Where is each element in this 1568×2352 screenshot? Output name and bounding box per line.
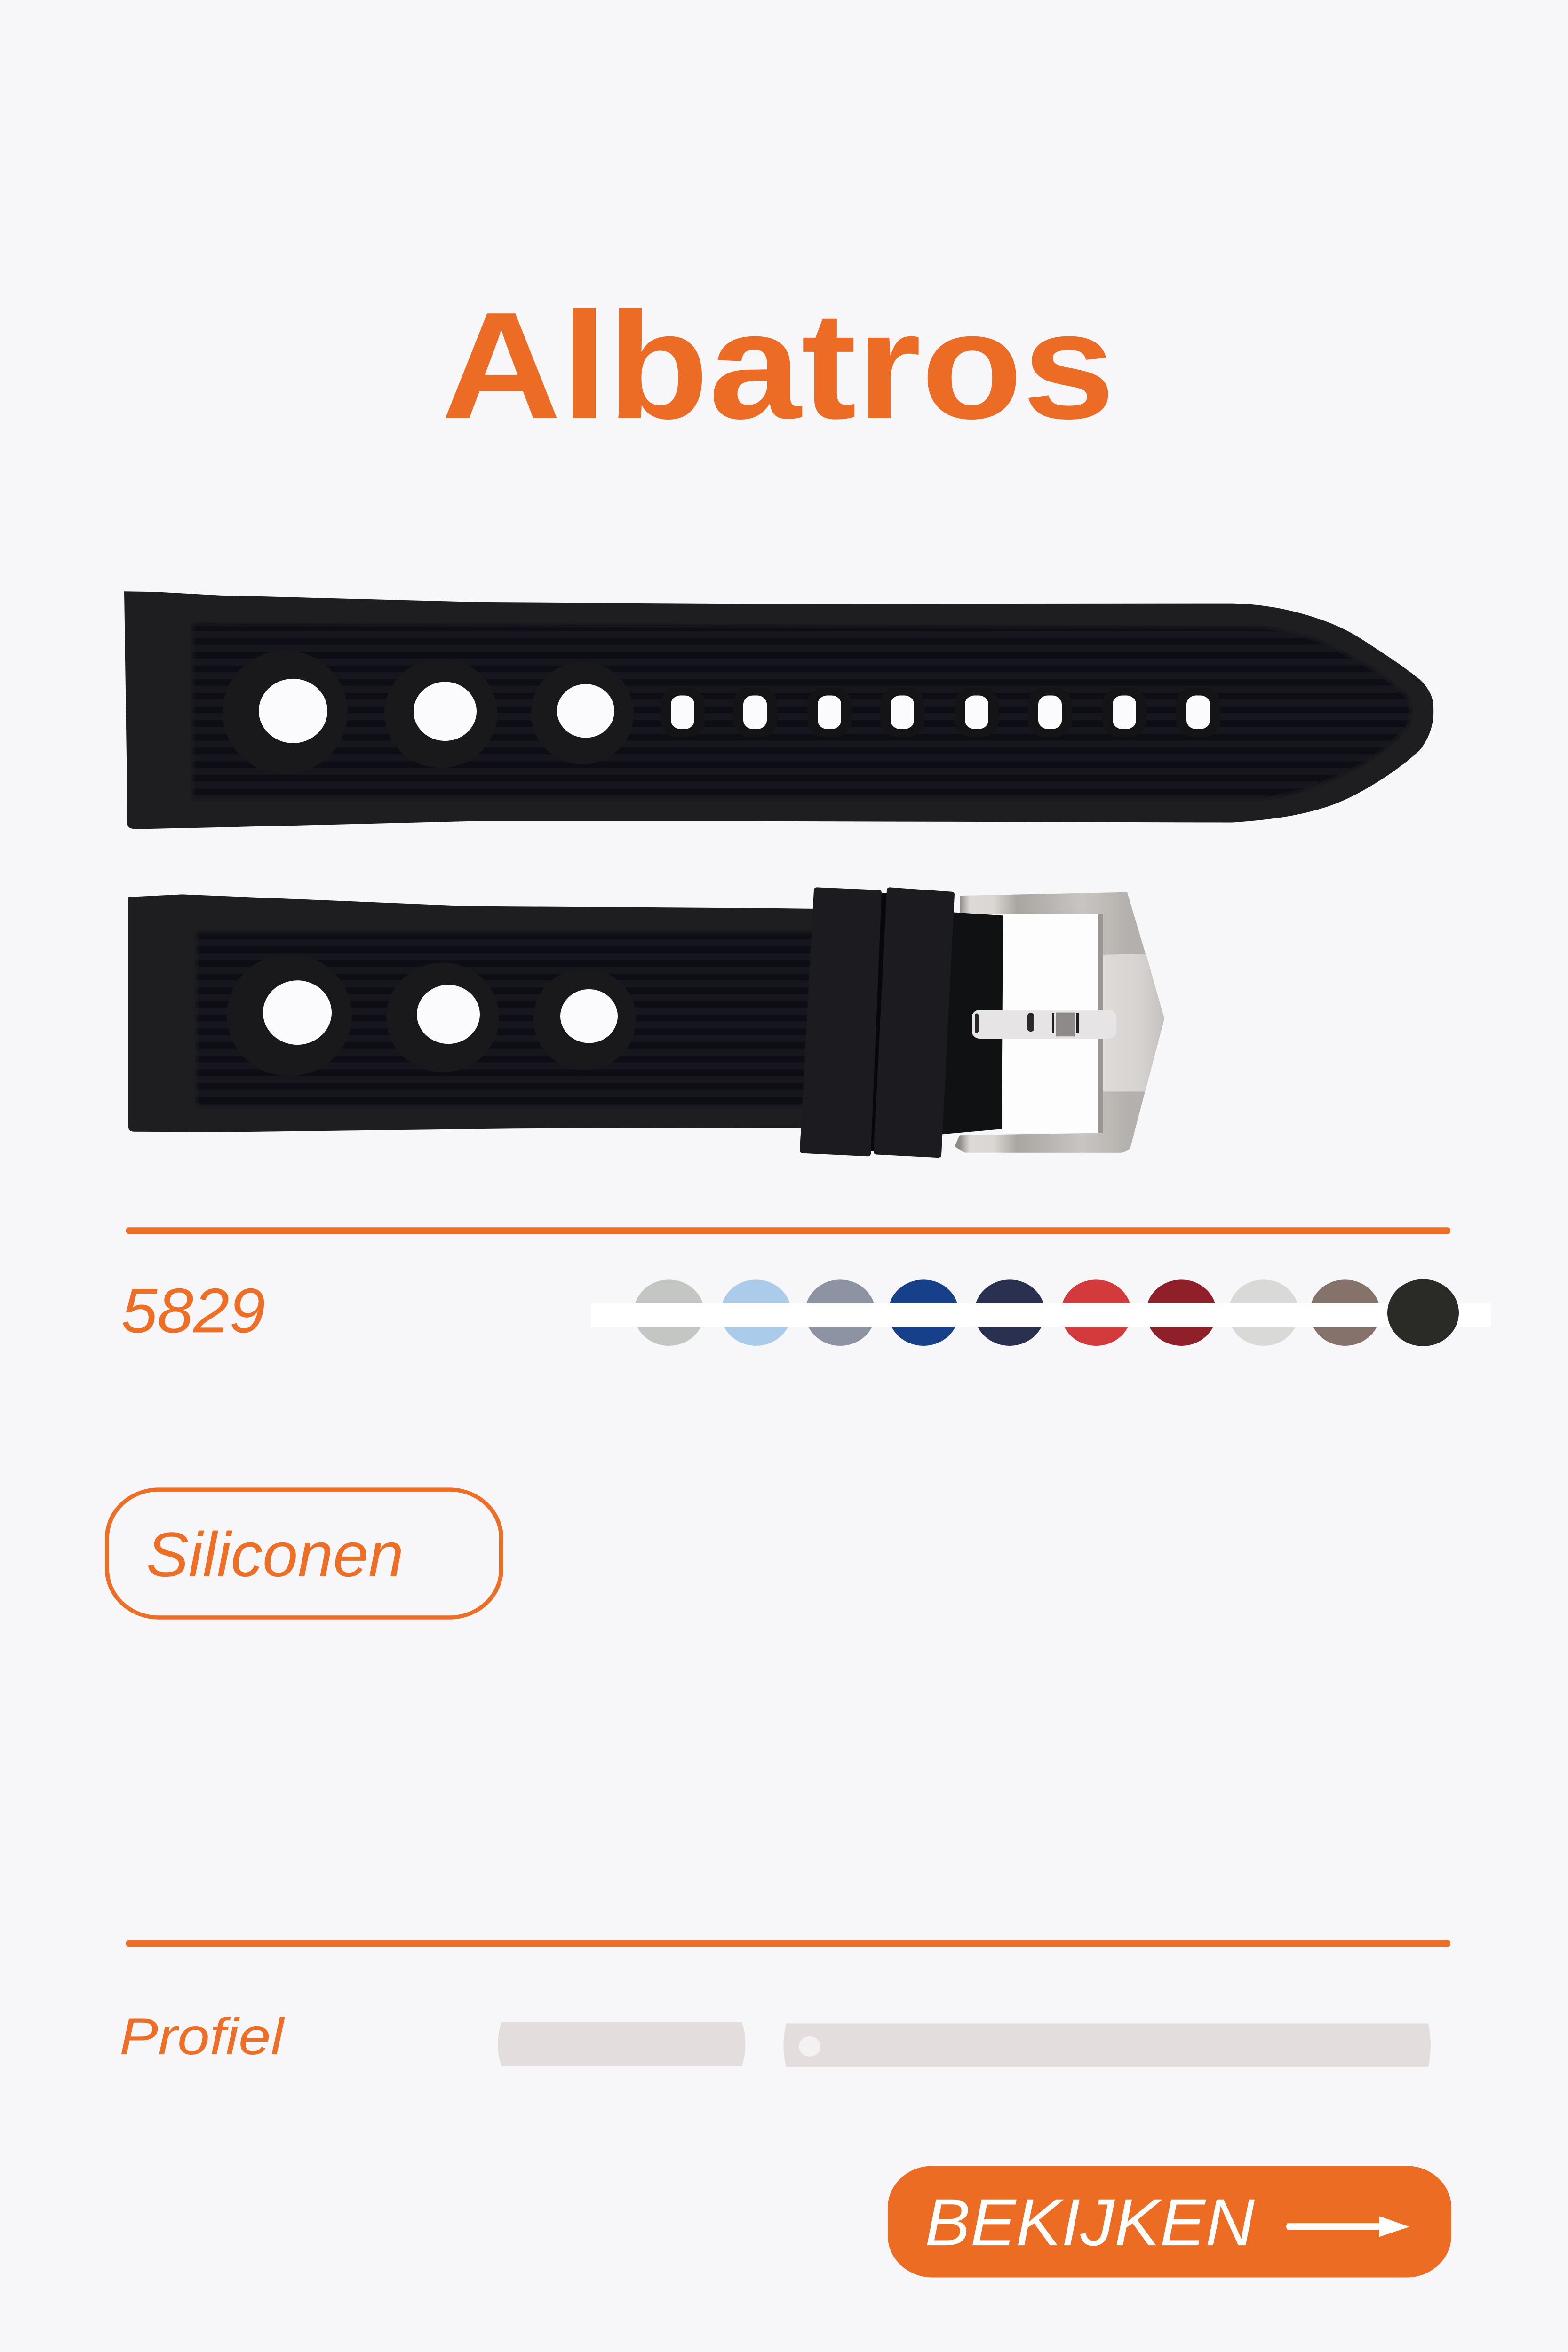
swatch circles [634,1279,1380,1346]
buckle centre plate [1103,954,1164,1091]
button shape [888,2166,1451,2278]
large hole 1 [227,954,352,1076]
large hole 2 [384,659,497,768]
buckle tongue [972,1010,1116,1039]
selected swatch: black [1387,1279,1459,1346]
watch strap: long piece [124,591,1433,829]
large hole 3 [531,662,634,764]
profile silhouette: long side [784,2024,1431,2067]
strap body [128,894,828,1132]
title: Albatros [441,280,1115,450]
profile label: Profiel [119,2008,285,2066]
large hole 3 [533,969,636,1070]
white band [591,1303,1491,1327]
profile silhouette: buckle side [498,2022,745,2066]
divider rule bottom [126,1940,1450,1947]
strap end behind buckle [927,911,1003,1136]
buckle opening [1003,914,1098,1133]
article number: 5829 [121,1276,265,1346]
buckle side shadow [1098,914,1103,1133]
ribbed panel [197,933,818,1106]
ribbed panel [193,625,1410,799]
material tag [107,1490,501,1617]
view button [888,2166,1451,2278]
divider rule top [126,1227,1450,1234]
small adjustment holes [661,688,1220,737]
gap between keeper loops [863,893,894,1151]
keeper loop 1 [803,890,879,1154]
colour swatches [591,1279,1491,1346]
tag label: Siliconen [146,1520,404,1590]
buckle [927,892,1164,1153]
buckle frame [955,892,1164,1153]
keeper loop 2 [876,890,952,1155]
arrow icon [1286,2216,1409,2237]
large hole 2 [386,963,499,1072]
watch strap: buckle piece [128,890,1164,1155]
strap body [124,591,1433,829]
tag outline [107,1490,501,1617]
large hole 1 [223,651,348,774]
button label: BEKIJKEN [925,2185,1255,2260]
